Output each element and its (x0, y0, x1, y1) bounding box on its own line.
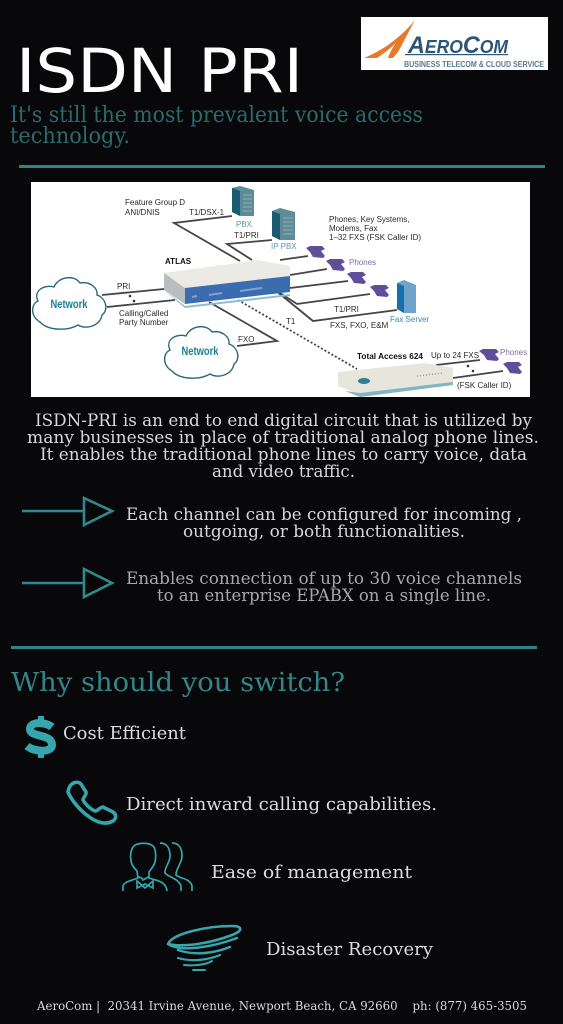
bullet: voice channels: Enables connection of up to 30 voice channels (126, 569, 522, 588)
diagram labels: ATLAS (165, 257, 192, 266)
diagram labels: IP PBX (271, 242, 297, 251)
logo: AeroCom: BUSINESS TELECOM & CLOUD SERVICE (404, 60, 545, 69)
intro text block (27, 411, 539, 481)
subtitle (10, 103, 423, 149)
diagram labels: ANI/DNIS (125, 208, 160, 217)
diagram labels: Feature Group D (125, 198, 185, 207)
ATLAS device (164, 260, 290, 308)
benefit: cost: Cost Efficient (63, 723, 187, 744)
diagram labels: T1/DSX-1 (189, 208, 225, 217)
title: ISDN PRI (16, 36, 303, 107)
bullet: channel configuration: outgoing, or both functionalities. (183, 522, 465, 541)
diagram labels: T1 (286, 317, 296, 326)
icon: tornado (168, 926, 240, 970)
diagram labels: FXO (238, 335, 254, 344)
intro text block: It enables the traditional phone lines to carry voice, data (40, 445, 527, 464)
diagram labels: Calling/Called (119, 309, 168, 318)
diagram labels: PRI (117, 282, 130, 291)
phones (306, 246, 522, 374)
diagram labels: Fax Server (390, 315, 429, 324)
IP PBX server (272, 208, 295, 240)
benefit: management: Ease of management (211, 862, 413, 883)
intro text block: many businesses in place of traditional analog phone lines. (27, 428, 539, 447)
subtitle: technology. (10, 124, 130, 149)
diagram labels: FXS, FXO, E&M (330, 321, 389, 330)
PBX server (232, 186, 254, 216)
diagram labels: (FSK Caller ID) (457, 381, 512, 390)
intro text block: ISDN-PRI is an end to end digital circuit that is utilized by (35, 411, 533, 430)
arrow 1 (22, 498, 112, 525)
diagram labels: Up to 24 FXS (431, 351, 479, 360)
diagram labels: PBX (236, 220, 253, 229)
heading: why switch: Why should you switch? (11, 668, 345, 698)
diagram labels: Phones (500, 348, 527, 357)
diagram labels: T1/PRI (334, 305, 359, 314)
diagram labels: Phones (349, 258, 376, 267)
intro text block: and video traffic. (212, 462, 355, 481)
icon: people (123, 843, 192, 891)
diagram labels: 1–32 FXS (FSK Caller ID) (329, 233, 421, 242)
connection lines (102, 216, 503, 378)
icon: dollar (27, 716, 52, 758)
arrow 2 (22, 569, 112, 597)
diagram labels: Network (182, 344, 219, 358)
Total Access 624 device (338, 363, 453, 397)
bullet: voice channels (126, 569, 522, 605)
diagram labels: Phones, Key Systems, (329, 215, 409, 224)
clouds (33, 278, 238, 378)
benefit: disaster recovery: Disaster Recovery (266, 939, 434, 960)
diagram labels: T1/PRI (234, 231, 259, 240)
logo: AeroCom: AEROCOM (407, 32, 509, 59)
bullet: voice channels: to an enterprise EPABX on a single line. (157, 586, 491, 605)
diagram labels: Modems, Fax (329, 224, 377, 233)
diagram labels: Network (50, 297, 88, 311)
icon: phone (68, 782, 116, 823)
bullet: channel configuration: Each channel can be configured for incoming , (126, 505, 522, 524)
logo: AeroCom (361, 17, 548, 70)
diagram labels: Total Access 624 (357, 352, 424, 361)
network diagram (31, 182, 530, 397)
fax server (397, 280, 416, 313)
diagram labels: Party Number (119, 318, 169, 327)
diagram labels (50, 198, 527, 390)
subtitle: It's still the most prevalent voice access (10, 103, 423, 128)
bullet: channel configuration (126, 505, 522, 541)
footer: AeroCom | 20341 Irvine Avenue, Newport Beach, CA 92660 ph: (877) 465-3505 (36, 998, 527, 1013)
benefit: calling: Direct inward calling capabilities. (126, 794, 437, 815)
